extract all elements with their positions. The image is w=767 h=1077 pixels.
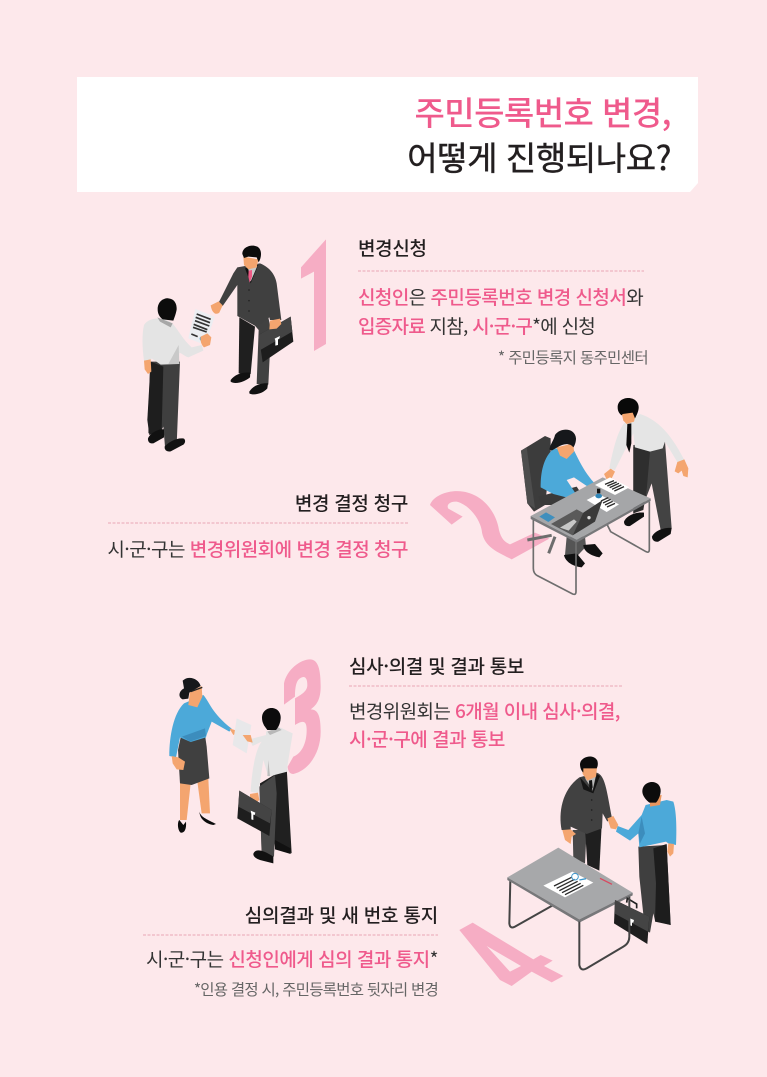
man with briefcase [237, 708, 293, 863]
paper [233, 718, 251, 753]
step 4 text block [143, 901, 438, 1000]
step 2 heading: 변경 결정 청구 [295, 489, 408, 516]
briefcase [237, 791, 272, 836]
step 1 illustration [142, 239, 326, 451]
desk [531, 477, 651, 594]
step 4 illustration [459, 757, 676, 986]
stamp [595, 489, 602, 498]
red pen [600, 878, 612, 884]
standing man with tie [604, 398, 688, 542]
title line 2: 어떻게 진행되나요? [407, 132, 671, 180]
step 3 body: 변경위원회는 6개월 이내 심사·의결, [349, 697, 620, 724]
office chair [521, 436, 555, 553]
title line 1: 주민등록번호 변경, [414, 87, 671, 135]
briefcase [614, 898, 649, 944]
suited man [211, 246, 293, 394]
step 2 body: 시·군·구는 변경위원회에 변경 결정 청구 [107, 535, 408, 562]
step 1 heading: 변경신청 [358, 234, 427, 261]
table [507, 848, 649, 969]
step 3 heading: 심사·의결 및 결과 통보 [349, 652, 524, 679]
document with barcode [543, 872, 593, 897]
step 3 text block [349, 652, 622, 752]
document [188, 309, 215, 345]
step 1 text block [358, 234, 648, 368]
step 3 illustration [169, 659, 321, 863]
desk legs back [607, 502, 649, 552]
suited man [561, 757, 612, 871]
number 1 [301, 239, 326, 351]
man in white shirt with document [142, 298, 215, 451]
woman in blue [169, 678, 240, 833]
briefcase [259, 317, 293, 362]
paper with barcode [587, 477, 629, 512]
step 2 text block [107, 489, 408, 562]
number 3 [284, 659, 321, 774]
title panel [77, 77, 698, 192]
man in blue [607, 782, 676, 933]
step 1 body: 신청인은 주민등록번호 변경 신청서와 [358, 283, 643, 310]
number 4 [459, 923, 563, 986]
step 4 heading: 심의결과 및 새 번호 통지 [245, 901, 438, 928]
step 1 body line 2: 입증자료 지참, 시·군·구*에 신청 [358, 312, 595, 339]
number 2 [430, 491, 549, 559]
step 2 illustration [430, 398, 688, 594]
step 4 body: 시·군·구는 신청인에게 심의 결과 통지* [146, 945, 438, 972]
seated woman [538, 430, 603, 567]
step 1 footnote: * 주민등록지 동주민센터 [498, 346, 648, 368]
step 3 body line 2: 시·군·구에 결과 통보 [349, 725, 505, 752]
laptop [551, 500, 603, 535]
step 4 footnote: *인용 결정 시, 주민등록번호 뒷자리 변경 [194, 978, 438, 1000]
tablet [539, 512, 555, 522]
